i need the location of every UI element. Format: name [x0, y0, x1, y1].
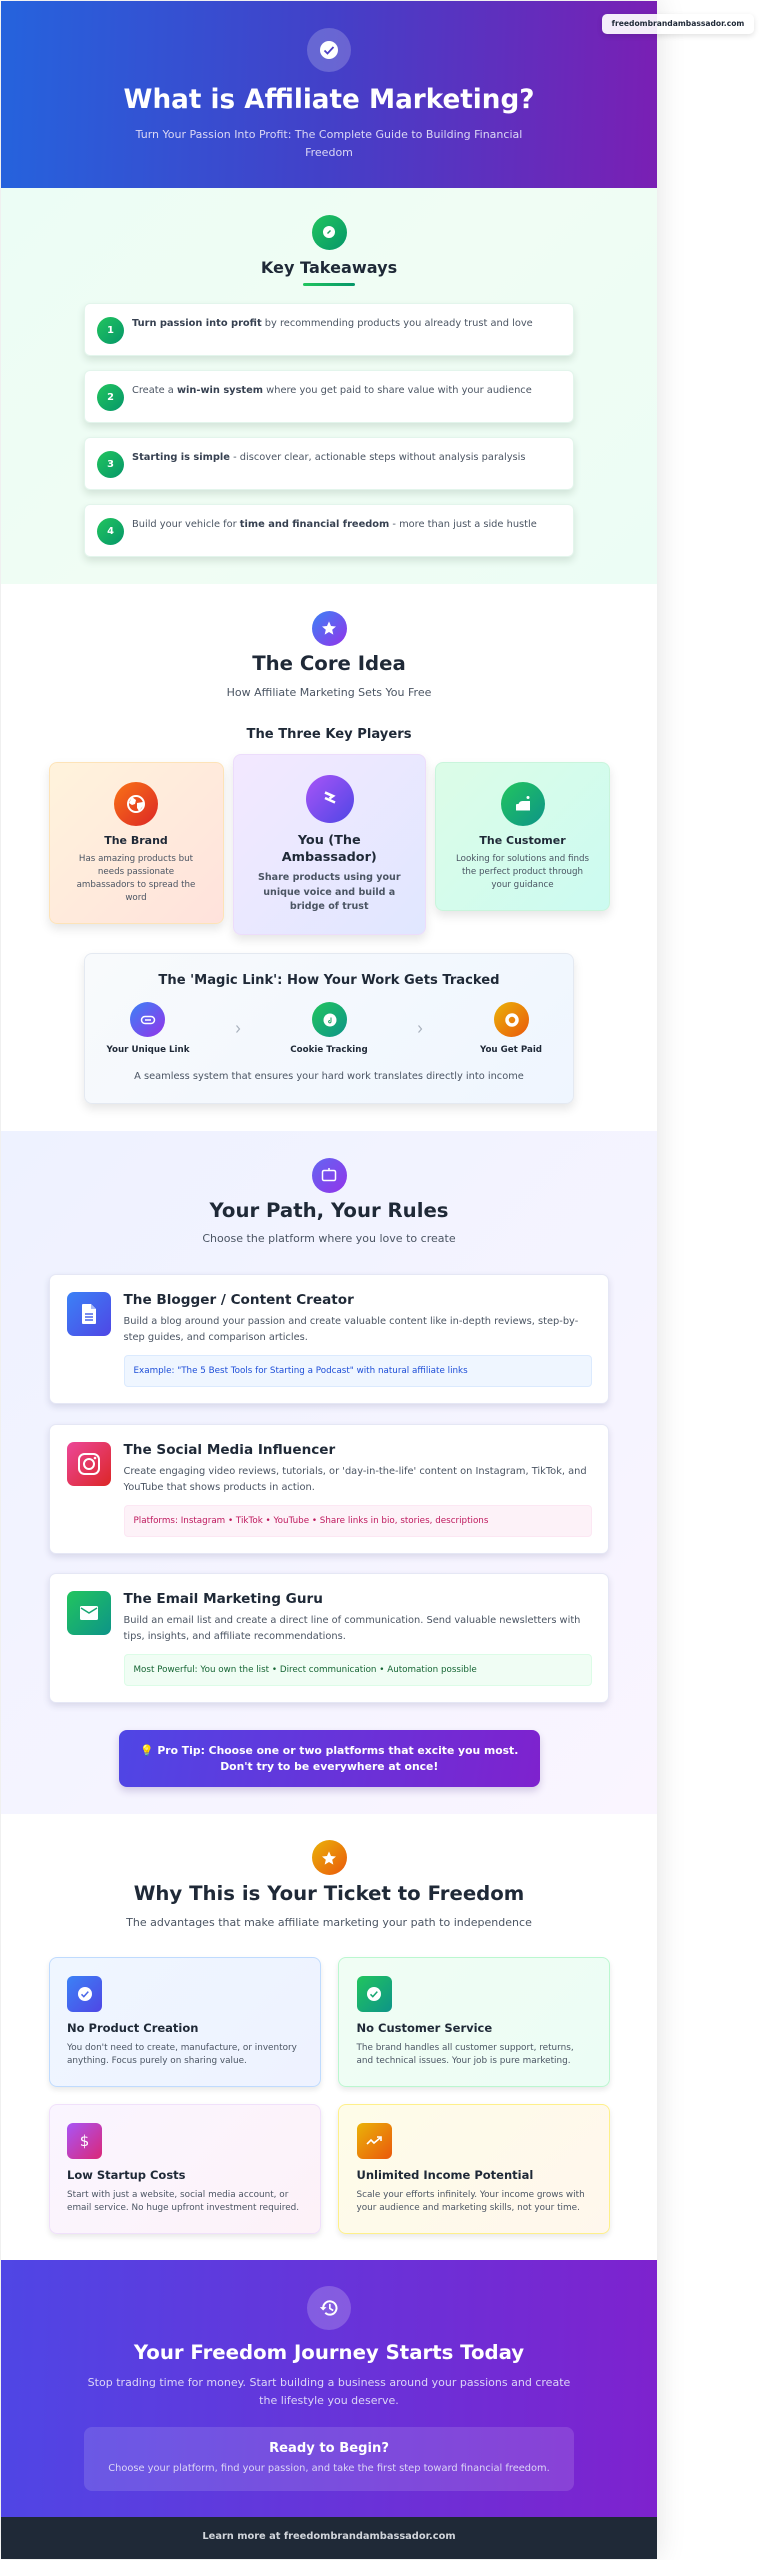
takeaway 2 [84, 370, 574, 423]
blogger title: The Blogger / Content Creator [124, 1292, 354, 1308]
customer title: The Customer [479, 834, 566, 847]
takeaway 4: 4 [107, 526, 114, 536]
blogger text [124, 1316, 578, 1342]
email text: tips, insights, and affiliate recommendations. [124, 1630, 346, 1642]
takeaway 1: Turn passion into profit by recommending products you already trust and love [132, 318, 533, 329]
underline [303, 283, 355, 286]
step icon: cookie [312, 1002, 347, 1037]
takeaway 3: Starting is simple - discover clear, actionable steps without analysis paralysis [132, 452, 526, 463]
email text [124, 1615, 580, 1642]
cta text: Stop trading time for money. Start building a business around your passions and create [88, 2376, 570, 2389]
panel: social media [48, 1424, 609, 1554]
step label 3: You Get Paid [480, 1044, 542, 1054]
takeaway 4 [84, 504, 574, 557]
blogger text: step guides, and comparison articles. [124, 1332, 308, 1342]
ambassador title: Ambassador) [282, 850, 377, 865]
icon: trend [356, 2123, 392, 2159]
panel: the brand [48, 762, 224, 924]
panel: ready to begin [84, 2427, 574, 2491]
brand text: Has amazing products but [79, 854, 193, 864]
title: No Customer Service [356, 2020, 492, 2034]
arrow 2 [418, 1025, 422, 1033]
footer [1, 2517, 657, 2559]
text: Start with just a website, social media account, or [67, 2190, 288, 2200]
step label 1: Your Unique Link [107, 1044, 189, 1054]
callout: pro tip: 💡 Pro Tip: Choose one or two platforms that excite you most. [140, 1744, 518, 1757]
brand text: needs passionate [98, 867, 174, 877]
brand text: word [125, 893, 147, 903]
social title: The Social Media Influencer [124, 1442, 335, 1458]
social text [124, 1466, 587, 1492]
heading: core idea: The Core Idea [252, 652, 406, 675]
subheading: core idea: How Affiliate Marketing Sets You Free [227, 686, 431, 699]
social platforms box: Platforms: Instagram • TikTok • YouTube • Share links in bio, stories, descriptions [134, 1516, 488, 1526]
icon: takeaways [312, 214, 346, 250]
icon: core idea star [312, 610, 346, 646]
blogger text: Build a blog around your passion and create valuable content like in-depth reviews, step-by- [124, 1316, 578, 1327]
badge: website [602, 14, 754, 34]
icon: dollar: $ [80, 2132, 89, 2150]
title: Unlimited Income Potential [356, 2168, 533, 2182]
text [356, 2190, 585, 2213]
takeaway 3: 3 [107, 458, 114, 470]
magic link caption: A seamless system that ensures your hard work translates directly into income [134, 1071, 524, 1082]
heading: key takeaways: Key Takeaways [261, 258, 397, 277]
icon: dollar [67, 2123, 102, 2159]
title: What is Affiliate Marketing? [124, 85, 534, 115]
panel: you (the ambassador) [233, 754, 426, 935]
customer text: Looking for solutions and finds [456, 854, 589, 864]
section: header [1, 1, 657, 188]
brand text [77, 854, 195, 903]
arrow 1 [236, 1025, 240, 1033]
social text: Create engaging video reviews, tutorials, or 'day-in-the-life' content on Instagram, TikTok, and [124, 1466, 587, 1477]
takeaway 1: 1 [107, 324, 114, 336]
email note box: Most Powerful: You own the list • Direct communication • Automation possible [134, 1665, 477, 1675]
email note box [124, 1654, 592, 1686]
section: your path your rules [1, 1131, 657, 1814]
panel: low startup costs [48, 2104, 320, 2234]
customer text: the perfect product through [462, 867, 583, 877]
subheading: path: Choose the platform where you love to create [202, 1232, 456, 1245]
subtitle: Turn Your Passion Into Profit: The Complete Guide to Building Financial Freedom [136, 128, 522, 159]
ambassador title: You (The [298, 833, 361, 848]
panel: email [48, 1573, 609, 1703]
panel: the customer [435, 762, 610, 911]
badge: website: freedombrandambassador.com [612, 18, 744, 28]
icon: document [66, 1292, 111, 1336]
magic link heading: The 'Magic Link': How Your Work Gets Tracked [158, 973, 500, 988]
icon: ambassador [306, 774, 354, 822]
step label 2: Cookie Tracking [290, 1044, 368, 1054]
panel: magic link [84, 953, 574, 1104]
step icon: paid [494, 1002, 529, 1037]
panel: no customer service [338, 1957, 610, 2087]
blogger example box [124, 1355, 592, 1387]
email title: The Email Marketing Guru [124, 1591, 323, 1607]
icon: globe [114, 782, 158, 826]
icon: freedom star [312, 1840, 346, 1875]
title: No Product Creation [67, 2020, 198, 2034]
section: call to action [1, 2260, 657, 2517]
step icon: link [130, 1002, 165, 1037]
ambassador text: bridge of trust [290, 901, 369, 912]
title: Low Startup Costs [67, 2168, 186, 2182]
icon: path [312, 1158, 346, 1192]
text: You don't need to create, manufacture, or inventory [67, 2042, 297, 2052]
customer text [456, 854, 589, 890]
icon: check green [356, 1976, 392, 2012]
ready title: Ready to Begin? [269, 2441, 389, 2456]
icon: header check [307, 28, 351, 72]
icon: check blue [67, 1976, 102, 2012]
email text: Build an email list and create a direct line of communication. Send valuable newsletters with [124, 1615, 580, 1626]
ambassador text [258, 872, 401, 912]
social text: YouTube that shows products in action. [124, 1482, 315, 1492]
heading: freedom journey: Your Freedom Journey Starts Today [134, 2341, 524, 2364]
subheading: freedom: The advantages that make affiliate marketing your path to independence [126, 1916, 532, 1929]
social platforms box [124, 1505, 592, 1537]
icon: customer [501, 782, 545, 826]
text: and technical issues. Your job is pure marketing. [356, 2056, 571, 2066]
ambassador text: unique voice and build a [263, 886, 395, 898]
section: key takeaways [1, 188, 657, 584]
takeaway 2: Create a win-win system where you get paid to share value with your audience [132, 385, 532, 396]
text: Scale your efforts infinitely. Your income grows with [356, 2190, 585, 2200]
panel: unlimited income [338, 2104, 610, 2234]
subheading: three key players: The Three Key Players [246, 727, 412, 742]
footer: Learn more at freedombrandambassador.com [202, 2531, 456, 2542]
brand title: The Brand [104, 834, 168, 847]
customer text: your guidance [491, 880, 554, 890]
ambassador title [282, 833, 377, 865]
ready text: Choose your platform, find your passion, and take the first step toward financial freedom. [108, 2463, 550, 2474]
takeaway 1 [84, 303, 574, 356]
icon: history [307, 2286, 351, 2330]
icon: envelope [66, 1591, 111, 1635]
panel: no product creation [48, 1957, 320, 2087]
text [67, 2042, 297, 2066]
text: The brand handles all customer support, returns, [356, 2042, 574, 2052]
text: anything. Focus purely on sharing value. [67, 2056, 247, 2066]
takeaway 2: 2 [107, 392, 114, 402]
text: email service. No huge upfront investment required. [67, 2203, 299, 2213]
heading: freedom: Why This is Your Ticket to Freedom [134, 1882, 524, 1905]
callout: pro tip: Don't try to be everywhere at once! [220, 1760, 438, 1772]
panel: blogger [48, 1274, 609, 1404]
heading: path: Your Path, Your Rules [209, 1199, 449, 1222]
cta text [88, 2376, 570, 2407]
cta text: the lifestyle you deserve. [259, 2394, 399, 2407]
ambassador text: Share products using your [258, 872, 401, 883]
takeaway 4: Build your vehicle for time and financial freedom - more than just a side hustle [132, 519, 537, 530]
text [356, 2042, 574, 2066]
icon: instagram [66, 1442, 111, 1486]
takeaway 3 [84, 437, 574, 490]
blogger example box: Example: "The 5 Best Tools for Starting a Podcast" with natural affiliate links [134, 1366, 468, 1376]
callout: pro tip [119, 1730, 540, 1787]
brand text: ambassadors to spread the [77, 880, 195, 890]
text [67, 2190, 299, 2213]
text: your audience and marketing skills, not your time. [356, 2203, 580, 2213]
